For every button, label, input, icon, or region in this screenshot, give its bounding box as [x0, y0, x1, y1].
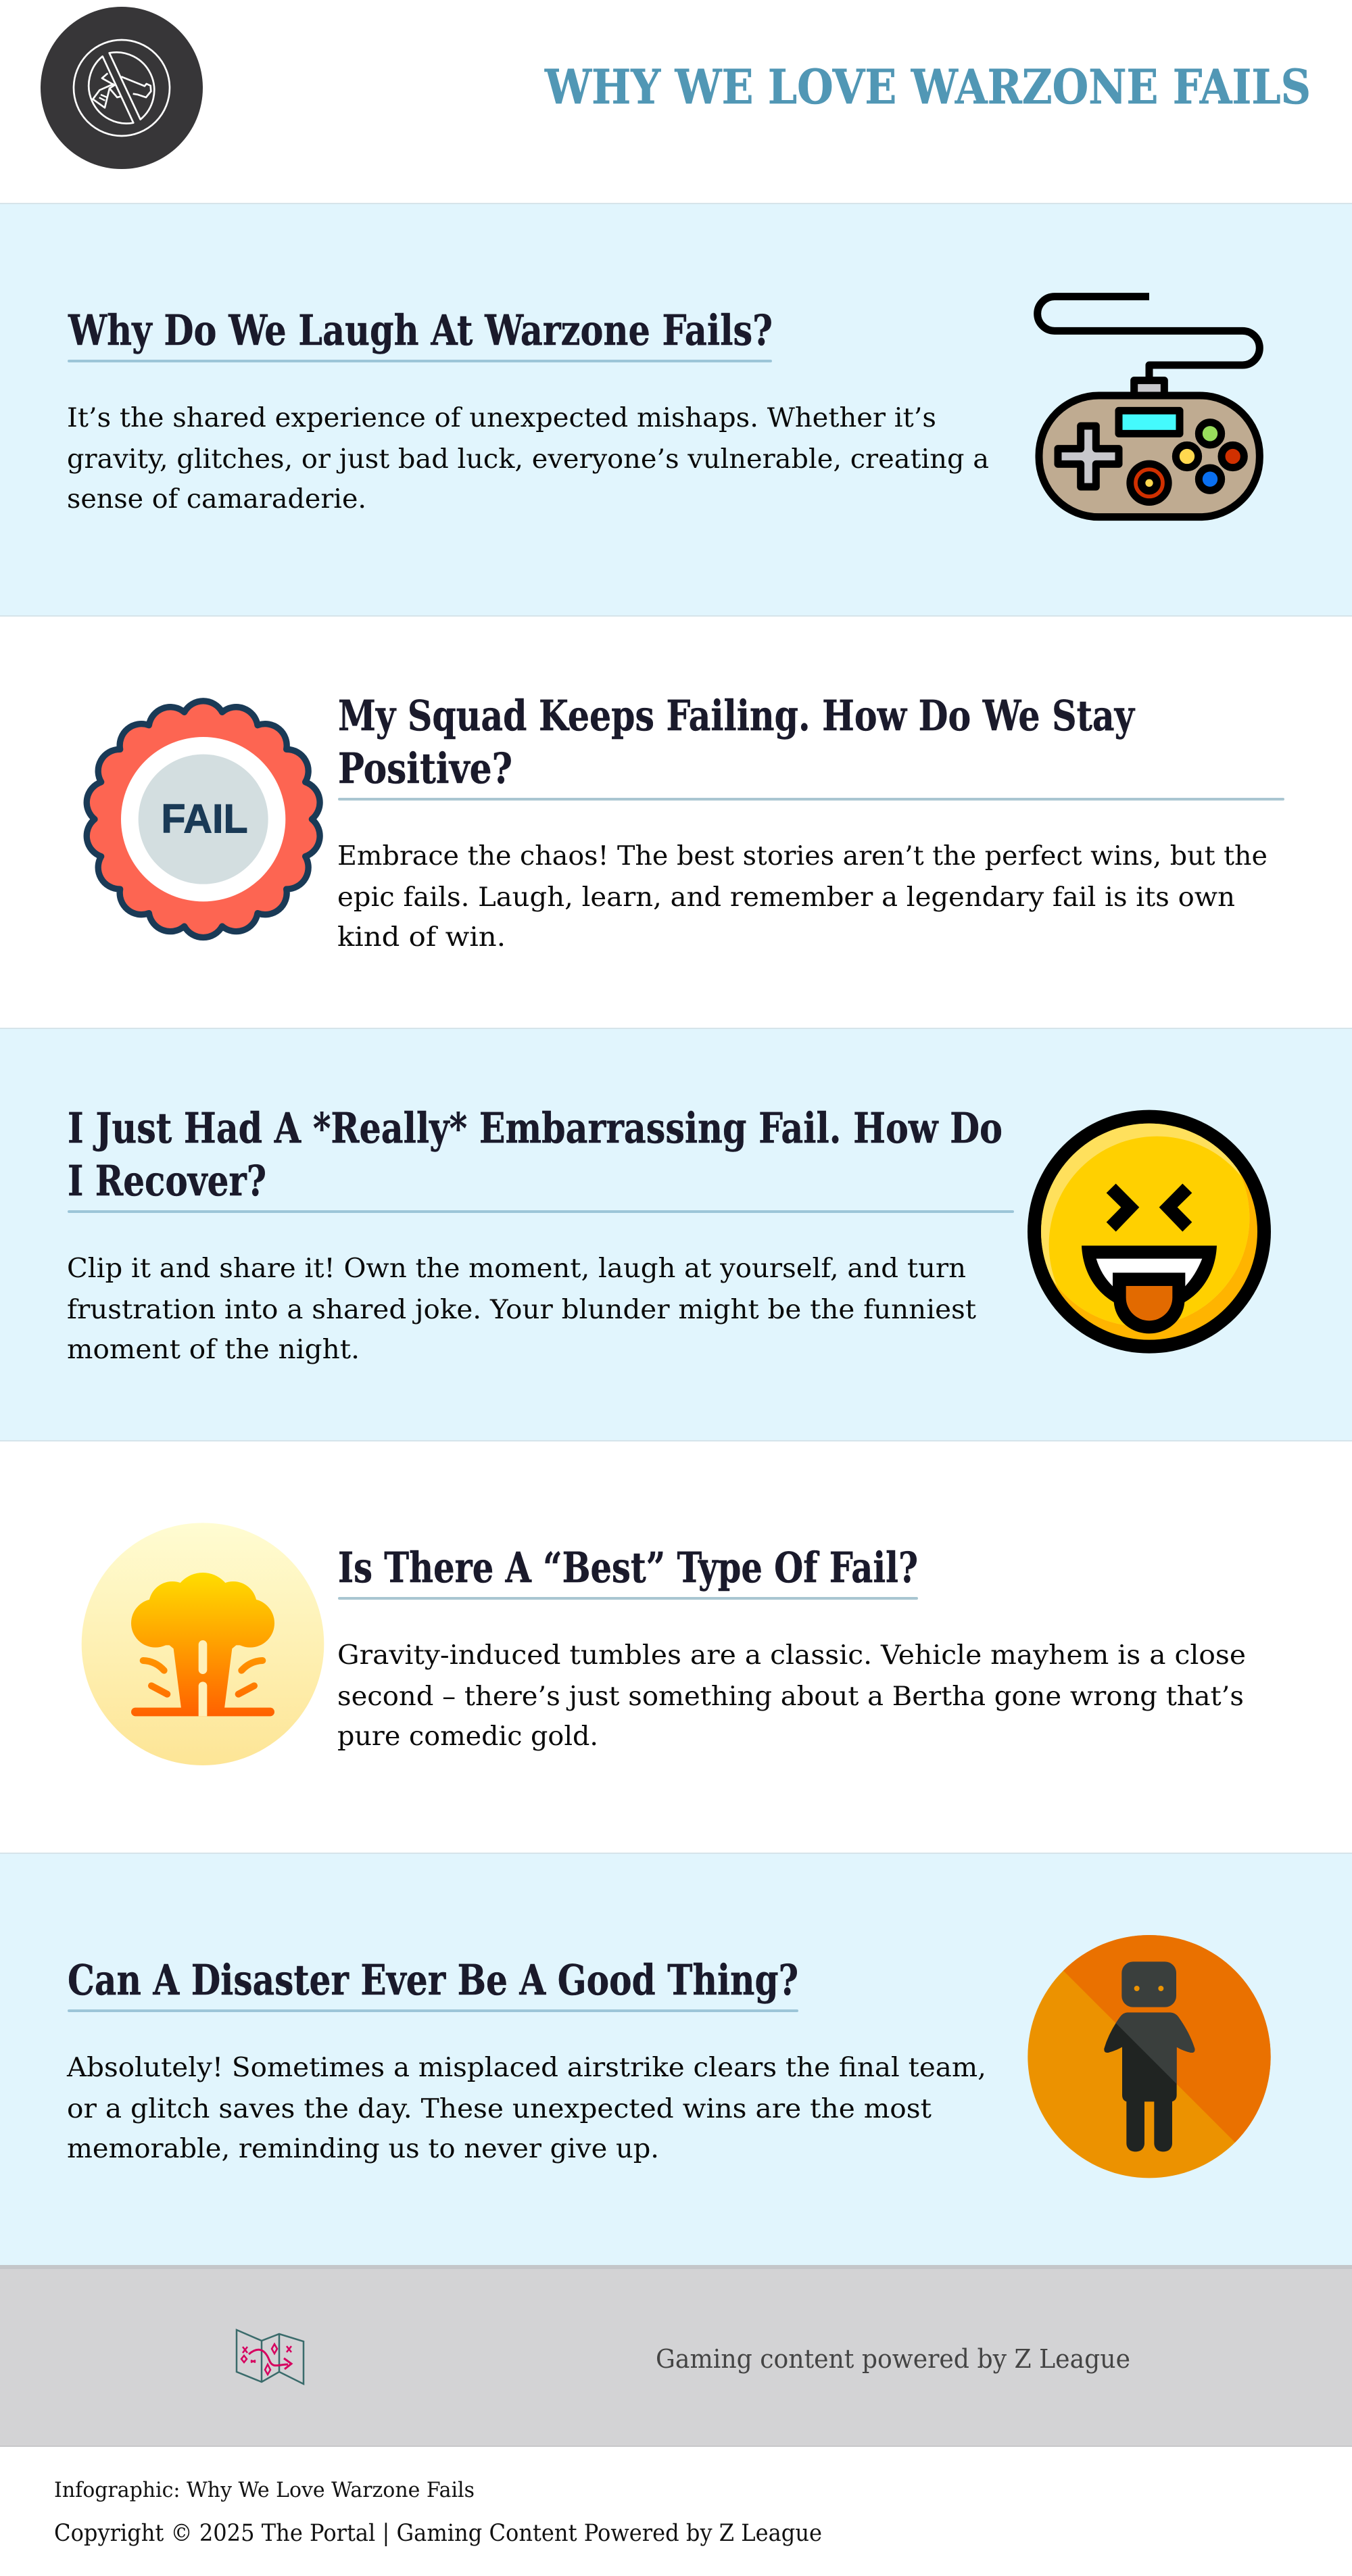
- heading: [68, 1103, 1003, 1206]
- icon: mushroom cloud: [82, 1523, 324, 1765]
- heading: I Recover?: [68, 1156, 266, 1206]
- icon: fail badge: [87, 701, 320, 938]
- panel: embarrassing fail: [0, 1028, 1352, 1440]
- body text: [337, 841, 1268, 953]
- panel: powered-by bar: [0, 2265, 1352, 2447]
- copyright: Copyright © 2025 The Portal | Gaming Content Powered by Z League: [54, 2520, 822, 2547]
- body text: gravity, glitches, or just bad luck, everyone’s vulnerable, creating a: [67, 444, 989, 475]
- heading: [338, 691, 1136, 793]
- body text: Absolutely! Sometimes a misplaced airstrike clears the final team,: [66, 2053, 986, 2083]
- icon: dark figure on orange circle: [1028, 1935, 1271, 2178]
- panel: best type of fail: [0, 1440, 1352, 1765]
- body text: Gravity-induced tumbles are a classic. Vehicle mayhem is a close: [337, 1640, 1246, 1671]
- body text: Embrace the chaos! The best stories aren’t the perfect wins, but the: [337, 841, 1268, 872]
- icon: folded map: [237, 2330, 304, 2384]
- body text: frustration into a shared joke. Your blunder might be the funniest: [67, 1295, 976, 1325]
- panel: squad keeps failing: [0, 615, 1352, 953]
- heading: Is There A “Best” Type Of Fail?: [338, 1543, 918, 1592]
- body text: memorable, reminding us to never give up.: [67, 2134, 659, 2164]
- body text: moment of the night.: [67, 1335, 360, 1365]
- heading: Positive?: [338, 744, 512, 793]
- body text: epic fails. Laugh, learn, and remember a legendary fail is its own: [337, 882, 1235, 913]
- body text: kind of win.: [337, 922, 506, 953]
- icon: fail badge: FAIL: [161, 796, 248, 842]
- panel: disaster good thing: [0, 1853, 1352, 2265]
- body text: [337, 1640, 1246, 1752]
- logo: crossed-out pistol: [41, 7, 203, 169]
- panel: why do we laugh: [0, 203, 1352, 615]
- body text: sense of camaraderie.: [67, 484, 366, 515]
- body text: Clip it and share it! Own the moment, laugh at yourself, and turn: [67, 1254, 966, 1284]
- header: [41, 7, 1311, 169]
- icon: game controller: [1038, 297, 1259, 517]
- heading: Can A Disaster Ever Be A Good Thing?: [68, 1955, 798, 2005]
- icon: laughing emoji: [1028, 1107, 1271, 1354]
- body text: It’s the shared experience of unexpected mishaps. Whether it’s: [67, 403, 936, 433]
- powered-by text: Gaming content powered by Z League: [656, 2344, 1130, 2374]
- body text: [66, 2053, 986, 2164]
- body text: pure comedic gold.: [337, 1721, 598, 1752]
- footer: [54, 2478, 822, 2547]
- body text: or a glitch saves the day. These unexpected wins are the most: [67, 2094, 932, 2124]
- heading: My Squad Keeps Failing. How Do We Stay: [338, 691, 1136, 740]
- body text: [67, 1254, 976, 1365]
- heading: I Just Had A *Really* Embarrassing Fail. How Do: [68, 1103, 1003, 1153]
- body text: second – there’s just something about a Bertha gone wrong that’s: [337, 1681, 1244, 1712]
- footer caption: Infographic: Why We Love Warzone Fails: [54, 2478, 475, 2502]
- body text: [67, 403, 989, 515]
- heading: Why Do We Laugh At Warzone Fails?: [68, 306, 773, 355]
